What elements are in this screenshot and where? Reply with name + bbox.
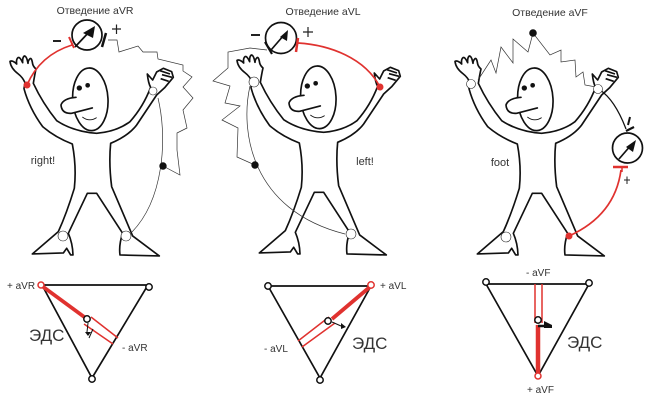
black wire and zigzag: aVL: [213, 48, 356, 239]
figure: aVF person: [455, 56, 618, 256]
triangle: aVF: - aVF: [526, 268, 550, 279]
triangle: aVR: + aVR: [7, 281, 35, 292]
label: right: right!: [31, 155, 55, 167]
triangle: aVR: [7, 281, 152, 382]
triangle: aVL: [264, 281, 407, 383]
label: left: left!: [356, 156, 374, 168]
meter: aVL galvanometer: [251, 22, 313, 54]
title: aVL lead: Отведение aVL: [285, 6, 361, 18]
triangle: aVR: - aVR: [122, 343, 148, 354]
label: foot: foot: [491, 157, 509, 169]
triangle: aVF: + aVF: [527, 385, 554, 396]
red lead wire: aVR: [24, 37, 74, 88]
black wire and zigzag: aVF: [466, 29, 626, 242]
red lead wire: aVL: [296, 38, 384, 90]
triangle: aVL: + aVL: [380, 281, 407, 292]
black wire and zigzag: aVR: [58, 40, 193, 241]
meter: aVF galvanometer: [612, 117, 642, 184]
triangle: aVF: [483, 268, 602, 396]
figure: aVR person: [10, 56, 173, 256]
triangle: aVF: ЭДС: [567, 333, 602, 352]
triangle: aVL: - aVL: [264, 344, 288, 355]
title: aVR lead: Отведение aVR: [57, 5, 134, 17]
triangle: aVR: ЭДС: [29, 326, 64, 345]
meter: aVR galvanometer: [53, 20, 121, 50]
red lead wire: aVF: [566, 170, 621, 240]
figure: aVL person: [237, 55, 400, 255]
triangle: aVL: ЭДС: [352, 334, 387, 353]
title: aVF lead: Отведение aVF: [512, 7, 588, 19]
